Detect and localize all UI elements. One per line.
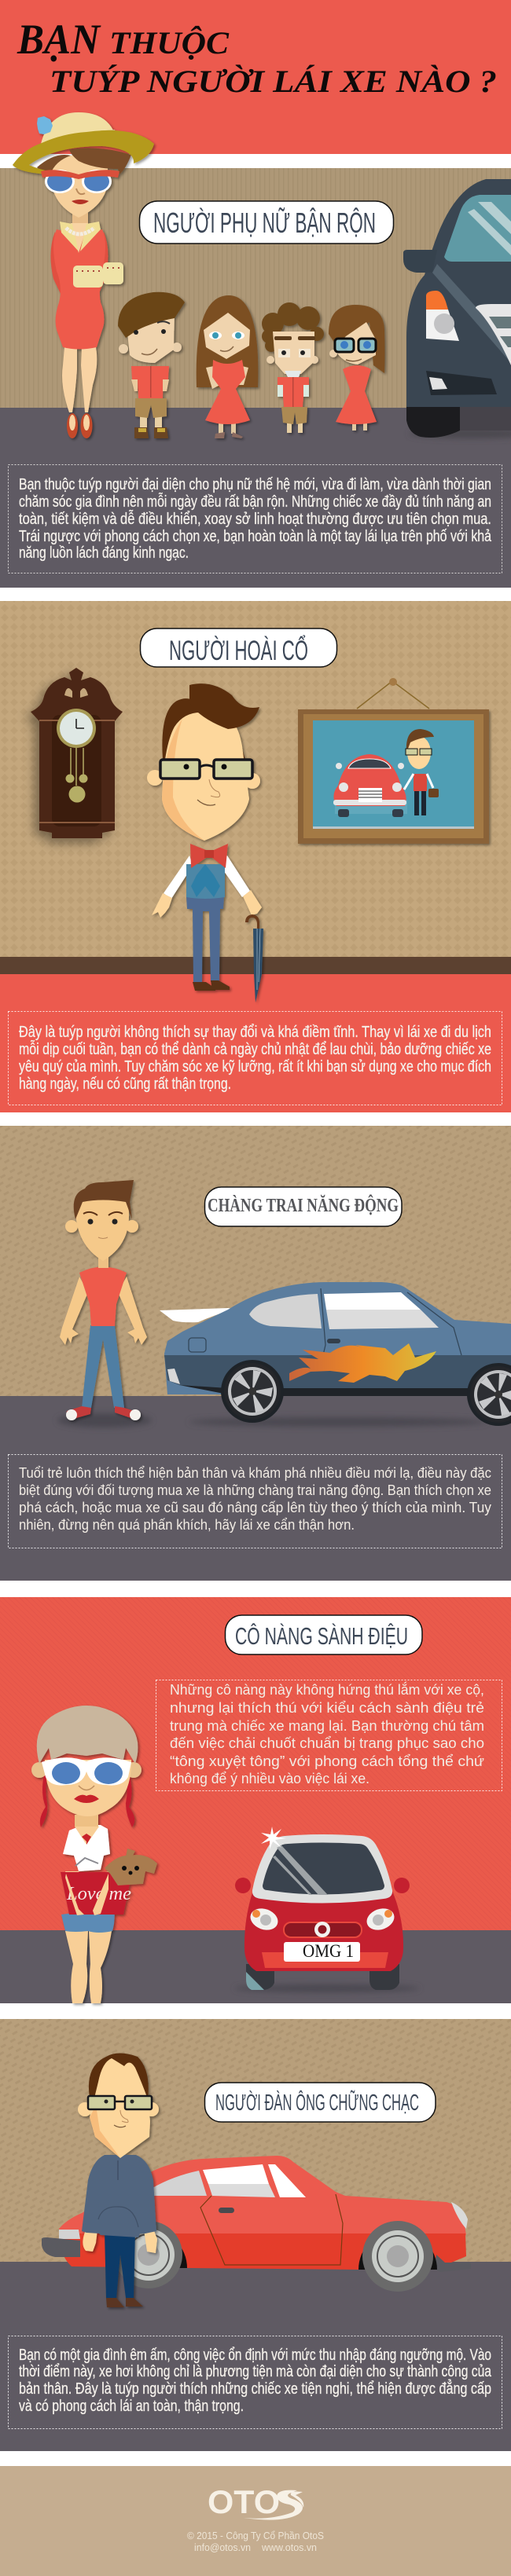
title: BẠN	[17, 16, 101, 63]
illustration: red city car: OMG 1	[303, 1941, 354, 1961]
text block: “tông xuyệt tông” với phong cách tổng thể chứ	[170, 1753, 484, 1769]
text block: không để ý nhiều vào việc lái xe.	[170, 1770, 369, 1786]
logo: OTOS: OTO	[208, 2483, 280, 2520]
illustration: red sports car	[42, 2156, 471, 2292]
heading badge	[140, 628, 336, 667]
mini red car	[333, 754, 406, 817]
illustration: young man	[57, 1180, 152, 1427]
illustration: red city car	[234, 1827, 420, 1992]
panel: nostalgic person	[0, 601, 511, 1112]
text block: Những cô nàng này không hứng thú lắm với xe cộ,	[170, 1681, 484, 1698]
illustration: boy one	[118, 292, 185, 438]
dog	[105, 1849, 157, 1885]
illustration: man with glasses and umbrella	[147, 683, 262, 991]
text block: và có phong cách lái an toàn, thận trọng.	[19, 2398, 244, 2415]
heading badge	[225, 1615, 422, 1654]
illustration: wall clock	[31, 668, 123, 838]
mini man	[404, 729, 439, 815]
heading badge: NGƯỜI HOÀI CỔ	[169, 635, 308, 666]
text block: hàng ngày, nếu có cũng rất thận trọng.	[19, 1075, 231, 1093]
text block	[8, 2336, 502, 2429]
panel: title banner	[0, 0, 511, 154]
title: TUÝP NGƯỜI LÁI XE NÀO ?	[50, 64, 497, 99]
panel: mature man	[0, 2019, 511, 2451]
illustration: blue car with flame	[160, 1282, 511, 1427]
panel: stylish girl	[0, 1597, 511, 2003]
title: THUỘC	[109, 25, 230, 60]
text block	[8, 465, 502, 573]
illustration: girl with long hair	[197, 295, 258, 438]
illustration: dark car front	[403, 179, 511, 438]
heading badge	[140, 201, 393, 244]
heading badge: NGƯỜI PHỤ NỮ BẬN RỘN	[153, 207, 376, 239]
copyright: info@otos.vn	[194, 2542, 251, 2553]
flame decal	[289, 1343, 436, 1383]
text block	[8, 1012, 502, 1105]
heading badge	[204, 1187, 402, 1226]
heading badge: CHÀNG TRAI NĂNG ĐỘNG	[208, 1195, 399, 1216]
illustration: girl with sunglasses and dog: Love me	[66, 1884, 131, 1904]
panel: footer	[0, 2466, 511, 2576]
heading badge: CÔ NÀNG SÀNH ĐIỆU	[235, 1622, 408, 1650]
illustration: girl with sunglasses and dog	[31, 1706, 157, 2003]
text block	[8, 1455, 502, 1548]
text block	[156, 1680, 502, 1791]
copyright	[187, 2530, 324, 2553]
panel: busy woman	[0, 112, 511, 588]
text block: nhưng lại thích thú với kiểu cách sành điệu trẻ	[170, 1699, 484, 1716]
illustration: man in hoodie	[78, 2054, 159, 2307]
illustration: woman with hat	[13, 112, 154, 438]
text block: phá cách, hoặc mua xe cũ sau đó nâng cấp lên tùy theo ý thích của mình. Tuy	[19, 1499, 492, 1515]
text block: đến việc chải chuốt chuẩn bị trang phục sao cho	[170, 1735, 484, 1751]
illustration: picture frame	[298, 678, 489, 844]
copyright: www.otos.vn	[261, 2542, 317, 2553]
illustration: umbrella	[245, 914, 263, 1002]
illustration: curly haired boy	[262, 302, 324, 433]
illustration: girl with glasses	[329, 305, 385, 431]
copyright: © 2015 - Công Ty Cổ Phần OtoS	[187, 2530, 324, 2541]
title	[17, 16, 497, 99]
shine star	[261, 1827, 286, 1849]
text block: trung mà chiếc xe mang lại. Bạn thường chú tâm	[170, 1717, 484, 1734]
heading badge	[204, 2083, 436, 2122]
text block: năng luồn lách đáng kinh ngạc.	[19, 544, 189, 562]
panel: dynamic guy	[0, 1126, 511, 1581]
text block: nhiên, đừng nên quá phấn khích, hãy lái xe cẩn thận hơn.	[19, 1516, 355, 1533]
